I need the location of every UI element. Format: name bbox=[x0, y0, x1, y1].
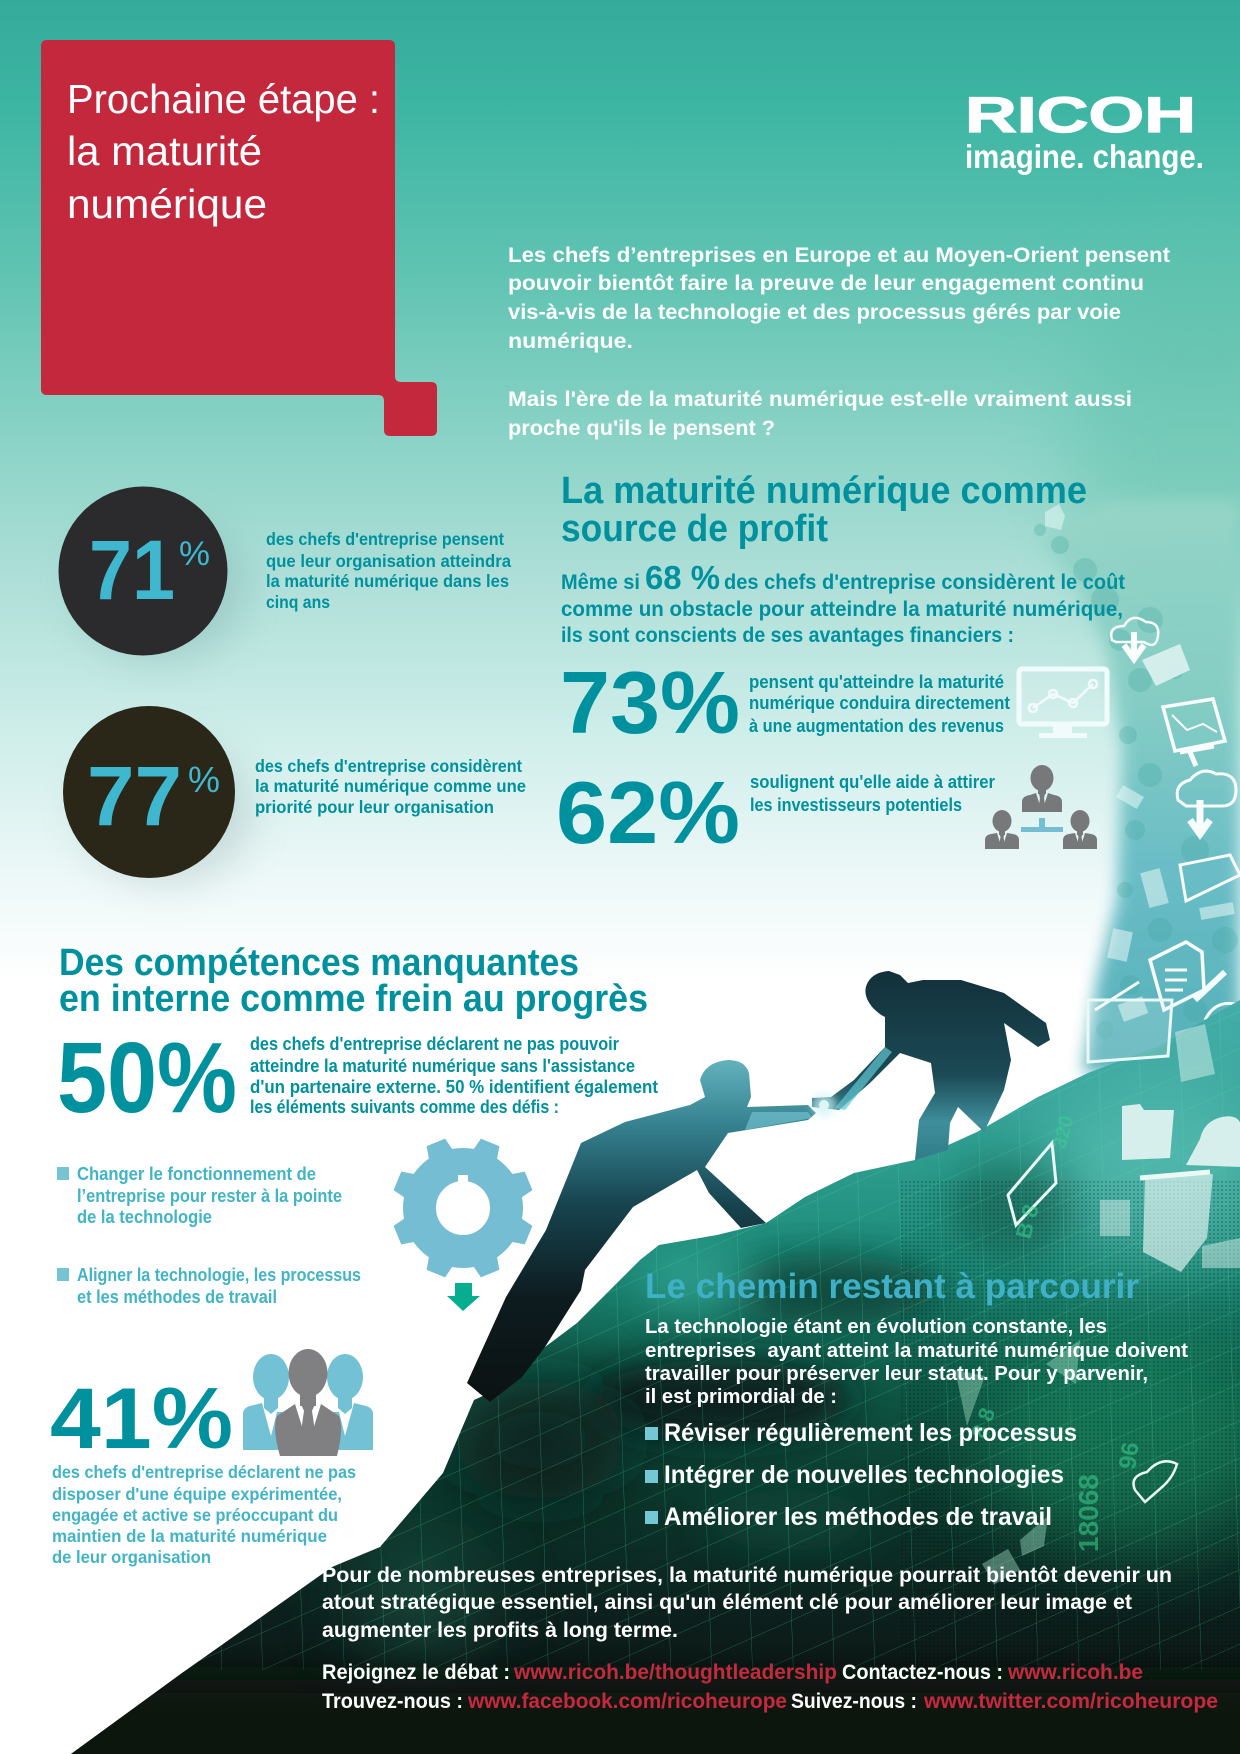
closing paragraph: Pour de nombreuses entreprises, la maturité numérique pourrait bientôt devenir un bbox=[322, 1564, 1172, 1587]
contact links: www.ricoh.be bbox=[1007, 1661, 1143, 1684]
road ahead text: il est primordial de : bbox=[645, 1386, 837, 1408]
contact links: Rejoignez le débat : bbox=[322, 1661, 510, 1684]
stat 73%: numérique conduira directement bbox=[749, 692, 1010, 713]
stat text 41%: de leur organisation bbox=[52, 1547, 211, 1567]
heading: the road ahead: Le chemin restant à parcourir bbox=[645, 1267, 1139, 1306]
contact links: Trouvez-nous : bbox=[322, 1690, 463, 1713]
stat 50% bbox=[57, 1022, 658, 1134]
icon: team of three bbox=[243, 1349, 373, 1456]
road ahead text: travailler pour préserver leur statut. Pour y parvenir, bbox=[645, 1363, 1148, 1385]
road ahead list: Réviser régulièrement les processus bbox=[664, 1419, 1077, 1447]
icon: monitor chart bbox=[1019, 669, 1107, 738]
challenges list: Aligner la technologie, les processus bbox=[77, 1265, 361, 1285]
Ricoh logo bbox=[965, 87, 1204, 175]
stat text 41%: engagée et active se préoccupant du bbox=[52, 1505, 338, 1525]
stat 62%: soulignent qu'elle aide à attirer bbox=[750, 771, 995, 792]
arrow: green down bbox=[447, 1283, 480, 1311]
stat text 41%: disposer d'une équipe expérimentée, bbox=[52, 1484, 342, 1504]
heading: profit: source de profit bbox=[561, 508, 828, 550]
icons and digits on the hill: 96 bbox=[1114, 1441, 1145, 1471]
heading: skills: Des compétences manquantes bbox=[59, 942, 579, 984]
stat text 71%: cinq ans bbox=[266, 592, 330, 612]
contact links: www.ricoh.be/thoughtleadership bbox=[513, 1661, 837, 1684]
challenges list bbox=[57, 1164, 361, 1307]
profit intro text: comme un obstacle pour atteindre la maturité numérique, bbox=[561, 597, 1123, 621]
stat 73% bbox=[560, 653, 1010, 752]
data swirl band with floating icons bbox=[1034, 500, 1240, 1073]
stat text 41% bbox=[52, 1462, 356, 1567]
stat circle 77%: % bbox=[188, 759, 220, 800]
stat 62% bbox=[556, 763, 995, 862]
climbers silhouettes bbox=[467, 971, 1050, 1402]
heading: profit bbox=[561, 470, 1087, 550]
contact links: Contactez-nous : bbox=[842, 1661, 1003, 1684]
intro text: proche qu'ils le pensent ? bbox=[508, 416, 775, 440]
closing paragraph: atout stratégique essentiel, ainsi qu'un élément clé pour améliorer leur image et bbox=[322, 1591, 1132, 1614]
stat text 71%: des chefs d'entreprise pensent bbox=[266, 529, 504, 549]
intro text: numérique. bbox=[508, 329, 633, 353]
Ricoh logo: imagine. change. bbox=[965, 138, 1204, 175]
profit intro text: 68 % bbox=[645, 559, 720, 596]
stat 73%: pensent qu'atteindre la maturité bbox=[749, 671, 1004, 692]
stat circle 71%: 71 bbox=[89, 523, 175, 617]
icons and digits on the hill: 18068 bbox=[1073, 1474, 1104, 1552]
icons and digits on the hill bbox=[955, 1000, 1240, 1585]
contact links: www.twitter.com/ricoheurope bbox=[923, 1690, 1218, 1713]
stat text 77%: la maturité numérique comme une bbox=[255, 776, 526, 796]
stat 50%: les éléments suivants comme des défis : bbox=[250, 1097, 559, 1117]
stat text 77% bbox=[255, 756, 526, 817]
stat circle 77%: 77 bbox=[87, 749, 182, 843]
intro text: Mais l'ère de la maturité numérique est-elle vraiment aussi bbox=[508, 387, 1132, 411]
challenges list: de la technologie bbox=[77, 1207, 212, 1227]
stat 41%: 41% bbox=[50, 1371, 233, 1467]
profit intro text: ils sont conscients de ses avantages financiers : bbox=[561, 623, 1014, 647]
heading: skills: en interne comme frein au progrès bbox=[59, 978, 648, 1020]
contact links bbox=[322, 1661, 1218, 1713]
stat 62%: 62% bbox=[556, 763, 740, 862]
title: la maturité bbox=[67, 128, 262, 174]
stat 62%: les investisseurs potentiels bbox=[750, 794, 962, 815]
challenges list: et les méthodes de travail bbox=[77, 1287, 277, 1307]
stat text 77%: des chefs d'entreprise considèrent bbox=[255, 756, 522, 776]
challenges list: Changer le fonctionnement de bbox=[77, 1164, 316, 1184]
heading: profit: La maturité numérique comme bbox=[561, 470, 1087, 512]
profit intro text: Même si bbox=[561, 570, 640, 594]
stat circle 71% bbox=[58, 486, 244, 662]
profit intro text: des chefs d'entreprise considèrent le coût bbox=[724, 570, 1125, 594]
stat 50%: des chefs d'entreprise déclarent ne pas pouvoir bbox=[250, 1034, 619, 1054]
stat circle 71%: % bbox=[179, 535, 210, 573]
stat 73%: à une augmentation des revenus bbox=[749, 715, 1004, 736]
road ahead text bbox=[645, 1316, 1188, 1408]
Ricoh logo: RICOH bbox=[965, 87, 1196, 143]
intro text bbox=[508, 243, 1170, 440]
heading: skills bbox=[59, 942, 648, 1020]
contact links: www.facebook.com/ricoheurope bbox=[467, 1690, 787, 1713]
road ahead text: La technologie étant en évolution constante, les bbox=[645, 1316, 1107, 1338]
road ahead list: Intégrer de nouvelles technologies bbox=[664, 1461, 1064, 1489]
stat 50%: atteindre la maturité numérique sans l'assistance bbox=[250, 1056, 635, 1076]
icons and digits on the hill: B 8 bbox=[1011, 1202, 1044, 1241]
contact links: Suivez-nous : bbox=[791, 1690, 917, 1713]
profit intro text bbox=[561, 559, 1125, 647]
icon: three investors bbox=[985, 765, 1097, 849]
stat text 71%: que leur organisation atteindra bbox=[266, 551, 511, 571]
intro text: vis-à-vis de la technologie et des processus gérés par voie bbox=[508, 300, 1121, 324]
stat text 41%: des chefs d'entreprise déclarent ne pas bbox=[52, 1462, 356, 1482]
intro text: pouvoir bientôt faire la preuve de leur engagement continu bbox=[508, 271, 1144, 295]
stat text 41%: maintien de la maturité numérique bbox=[52, 1526, 327, 1546]
closing paragraph bbox=[322, 1564, 1172, 1642]
icon: gear bbox=[392, 1137, 534, 1279]
stat 50%: 50% bbox=[57, 1022, 237, 1134]
icons and digits on the hill: 8 8 bbox=[966, 1404, 1000, 1442]
red title box bbox=[41, 40, 437, 436]
title: numérique bbox=[67, 181, 267, 227]
stat 50%: d'un partenaire externe. 50 % identifient également bbox=[250, 1077, 658, 1097]
icons and digits on the hill: 320 bbox=[1049, 1113, 1078, 1151]
title: Prochaine étape : bbox=[67, 76, 380, 122]
road ahead list bbox=[645, 1419, 1077, 1531]
stat text 71% bbox=[266, 529, 511, 612]
closing paragraph: augmenter les profits à long terme. bbox=[322, 1619, 678, 1642]
stat text 71%: la maturité numérique dans les bbox=[266, 571, 509, 591]
road ahead list: Améliorer les méthodes de travail bbox=[664, 1503, 1052, 1531]
stat circle 77% bbox=[63, 706, 252, 884]
challenges list: l’entreprise pour rester à la pointe bbox=[77, 1186, 342, 1206]
stat 73%: 73% bbox=[560, 653, 740, 752]
title bbox=[67, 76, 380, 227]
dark hill with data grid bbox=[0, 1000, 1240, 1754]
stat text 77%: priorité pour leur organisation bbox=[255, 797, 494, 817]
intro text: Les chefs d’entreprises en Europe et au Moyen-Orient pensent bbox=[508, 243, 1170, 267]
road ahead text: entreprises ayant atteint la maturité numérique doivent bbox=[645, 1340, 1188, 1362]
